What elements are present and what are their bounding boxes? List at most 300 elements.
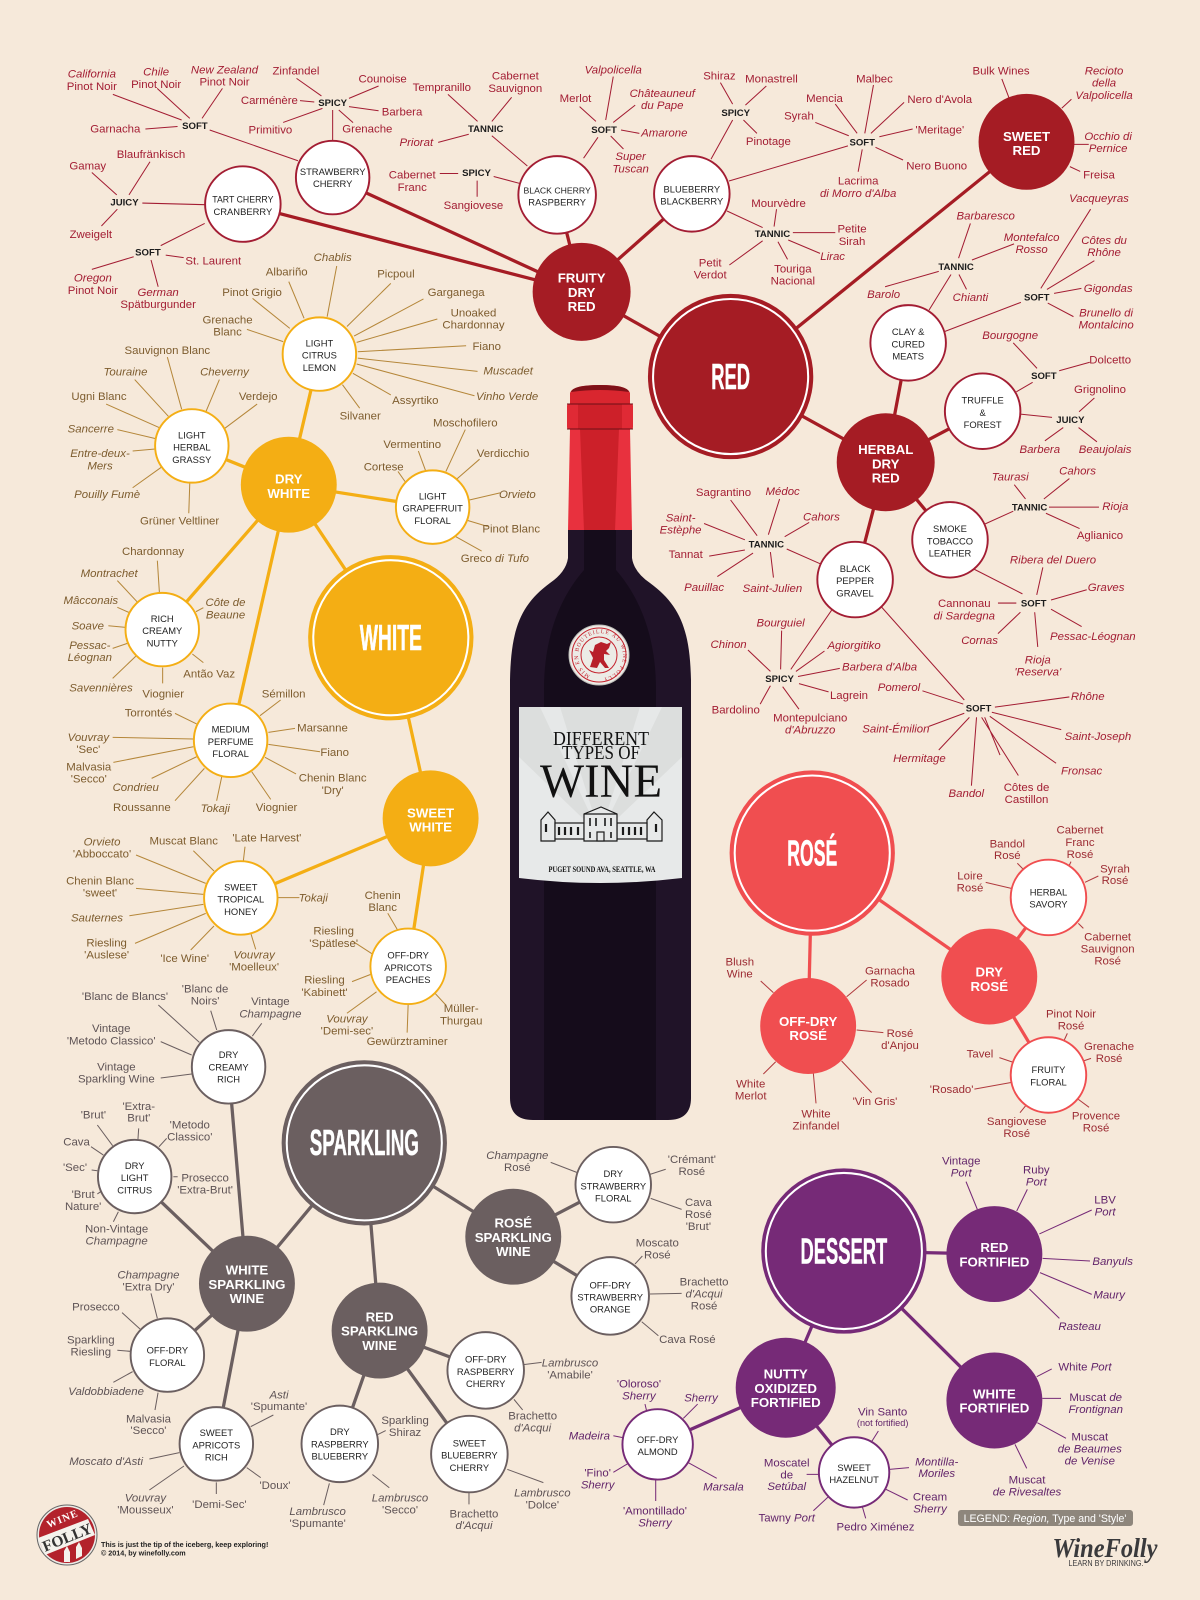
varietal labels: Gewürztraminer bbox=[367, 1036, 448, 1048]
varietal labels: Priorat bbox=[400, 137, 434, 149]
varietal labels: Vintage bbox=[251, 996, 290, 1008]
varietal labels: 'Vin Gris' bbox=[853, 1096, 897, 1108]
node: truffle and forest: & bbox=[980, 408, 987, 418]
connector lines bbox=[92, 162, 205, 287]
varietal labels: Montilla- bbox=[915, 1456, 958, 1468]
varietal labels: Pinot Grigio bbox=[222, 287, 282, 299]
varietal labels: di Morro d'Alba bbox=[820, 188, 896, 200]
varietal labels bbox=[63, 1101, 233, 1247]
group: dry creamy rich bbox=[67, 983, 301, 1104]
varietal labels: Roussanne bbox=[113, 802, 171, 814]
varietal labels: Brachetto bbox=[450, 1508, 498, 1520]
varietal labels: Grenache bbox=[1084, 1041, 1134, 1053]
node: smoke tobacco leather: LEATHER bbox=[929, 549, 971, 559]
varietal labels bbox=[66, 688, 367, 815]
varietal labels: Cabernet bbox=[492, 71, 539, 83]
varietal labels: Grenache bbox=[203, 314, 253, 326]
hub: sweet white bbox=[383, 770, 479, 866]
varietal labels: Brunello di bbox=[1079, 307, 1133, 319]
node: off-dry almond: ALMOND bbox=[638, 1447, 678, 1457]
node: dry creamy rich: RICH bbox=[217, 1075, 240, 1085]
varietal labels: de Beaumes bbox=[1058, 1443, 1122, 1455]
varietal labels: Rosé bbox=[957, 882, 983, 894]
varietal labels: Grignolino bbox=[1074, 384, 1126, 396]
varietal labels: Pouilly Fumè bbox=[74, 489, 140, 501]
varietal labels bbox=[569, 1378, 744, 1530]
varietal labels: Sauvignon Blanc bbox=[125, 345, 210, 357]
varietal labels: Orvieto bbox=[499, 489, 536, 501]
hub: fruity dry red: FRUITY bbox=[558, 271, 606, 286]
connector lines bbox=[149, 1415, 273, 1494]
varietal labels: Tuscan bbox=[612, 163, 649, 175]
hub: white fortified: WHITE bbox=[973, 1386, 1016, 1401]
varietal labels: Pinot Noir bbox=[67, 81, 117, 93]
hub: fruity dry red bbox=[533, 243, 631, 341]
varietal labels: 'Kabinett' bbox=[301, 987, 348, 999]
connector lines bbox=[1013, 343, 1097, 442]
group: off-dry floral bbox=[67, 1270, 204, 1437]
varietal labels: Rioja bbox=[1025, 654, 1051, 666]
varietal labels: Malvasia bbox=[126, 1413, 171, 1425]
node: light grapefruit floral bbox=[396, 470, 469, 544]
varietal labels: Ugni Blanc bbox=[71, 391, 127, 403]
node: off-dry raspberry cherry: OFF-DRY bbox=[465, 1355, 506, 1365]
hub: nutty oxidized fortified: OXIDIZED bbox=[754, 1381, 817, 1396]
varietal labels: della bbox=[1092, 78, 1116, 90]
varietal labels: Port bbox=[951, 1168, 973, 1180]
group: medium perfume floral bbox=[66, 688, 367, 815]
varietal labels: d'Acqui bbox=[455, 1520, 493, 1532]
varietal labels: Sherry bbox=[622, 1390, 657, 1402]
varietal labels: Pernice bbox=[1089, 143, 1127, 155]
thick connectors: dessert bbox=[658, 1251, 994, 1472]
connector lines bbox=[885, 209, 1094, 332]
varietal labels: Rosé bbox=[1083, 1122, 1109, 1134]
hub: red sparkling wine bbox=[332, 1283, 428, 1379]
varietal labels: Super bbox=[615, 151, 646, 163]
node: dry strawberry floral: FLORAL bbox=[595, 1194, 632, 1204]
varietal labels: SOFT bbox=[849, 137, 875, 148]
varietal labels: SOFT bbox=[966, 704, 991, 715]
legend bbox=[958, 1510, 1133, 1526]
logo: wine folly badge: WINE bbox=[45, 1508, 80, 1531]
node: sweet tropical honey: TROPICAL bbox=[217, 895, 264, 905]
node: off-dry floral bbox=[131, 1318, 204, 1392]
varietal labels: Valpolicella bbox=[585, 64, 642, 76]
connector lines bbox=[711, 83, 913, 265]
varietal labels: Franc bbox=[398, 182, 427, 194]
varietal labels: Vouvray bbox=[326, 1013, 369, 1025]
panel: rose wines bbox=[726, 770, 1135, 1140]
varietal labels: Nature' bbox=[65, 1201, 101, 1213]
varietal labels: Provence bbox=[1072, 1110, 1120, 1122]
varietal labels: Pessac- bbox=[69, 640, 110, 652]
varietal labels: Setúbal bbox=[767, 1481, 807, 1493]
connector lines bbox=[807, 1431, 909, 1518]
node: sweet red: RED bbox=[1013, 143, 1041, 158]
connector lines bbox=[113, 1293, 158, 1410]
varietal labels: Champagne bbox=[86, 1235, 148, 1247]
varietal labels: Riesling bbox=[313, 926, 354, 938]
varietal labels: White bbox=[736, 1078, 765, 1090]
varietal labels: 'Brut' bbox=[686, 1221, 711, 1233]
node: truffle and forest: TRUFFLE bbox=[962, 396, 1004, 406]
varietal labels: Garnacha bbox=[90, 124, 141, 136]
varietal labels: SOFT bbox=[1024, 293, 1050, 304]
varietal labels: Cabernet bbox=[389, 170, 436, 182]
node: clay and cured meats bbox=[870, 305, 946, 381]
node: clay and cured meats: MEATS bbox=[892, 352, 924, 362]
node: black cherry raspberry: RASPBERRY bbox=[528, 198, 587, 208]
panel: sparkling wines bbox=[63, 983, 728, 1532]
varietal labels: 'Spumante' bbox=[251, 1401, 307, 1413]
node: off-dry strawberry orange: STRAWBERRY bbox=[577, 1292, 644, 1302]
varietal labels: 'Ice Wine' bbox=[160, 953, 209, 965]
group: herbal savory bbox=[957, 824, 1135, 967]
connector lines bbox=[966, 1182, 1092, 1318]
varietal labels: Sherry bbox=[913, 1503, 948, 1515]
node: dry strawberry floral: DRY bbox=[603, 1169, 623, 1179]
varietal labels: Prosecco bbox=[181, 1172, 229, 1184]
varietal labels: 'Meritage' bbox=[915, 125, 964, 137]
varietal labels: Prosecco bbox=[72, 1302, 120, 1314]
node: herbal savory: HERBAL bbox=[1030, 887, 1067, 897]
connector lines bbox=[1002, 79, 1089, 171]
varietal labels: Freisa bbox=[1083, 170, 1115, 182]
varietal labels: Saint-Julien bbox=[743, 583, 802, 595]
varietal labels: Bandol bbox=[949, 788, 985, 800]
hub: off-dry rose: OFF-DRY bbox=[779, 1014, 837, 1029]
varietal labels: Cahors bbox=[803, 511, 840, 523]
hub: fruity dry red: RED bbox=[568, 299, 596, 314]
varietal labels: 'Secco' bbox=[130, 1425, 166, 1437]
varietal labels: Shiraz bbox=[389, 1427, 422, 1439]
varietal labels: Greco di Tufo bbox=[461, 553, 529, 565]
varietal labels: Viognier bbox=[142, 688, 184, 700]
node: blueberry blackberry: BLACKBERRY bbox=[660, 197, 724, 207]
varietal labels: Viognier bbox=[256, 802, 298, 814]
label location text: PUGET SOUND AVA, SEATTLE, WA bbox=[548, 864, 656, 874]
connector lines bbox=[158, 1005, 262, 1078]
varietal labels: 'Blanc de Blancs' bbox=[82, 991, 168, 1003]
varietal labels: Sparkling bbox=[381, 1415, 429, 1427]
varietal labels: Rosé bbox=[504, 1162, 531, 1174]
node: dry creamy rich: CREAMY bbox=[209, 1062, 249, 1072]
hub: fruity dry red: DRY bbox=[568, 285, 596, 300]
varietal labels: Rosé bbox=[994, 850, 1021, 862]
varietal labels: 'Mousseux' bbox=[117, 1504, 174, 1516]
connector lines bbox=[347, 913, 446, 1033]
varietal labels: Pomerol bbox=[878, 682, 921, 694]
varietal labels: 'Brut bbox=[72, 1189, 95, 1201]
node: sweet red bbox=[979, 94, 1074, 190]
varietal labels: Malvasia bbox=[66, 761, 111, 773]
node: sweet apricots rich bbox=[180, 1407, 253, 1481]
varietal labels: 'Spätlese' bbox=[309, 938, 358, 950]
node: rich creamy nutty: NUTTY bbox=[147, 638, 179, 648]
label title: TYPES OF bbox=[562, 742, 640, 764]
varietal labels: 'Extra-Brut' bbox=[177, 1185, 233, 1197]
varietal labels: 'Crémant' bbox=[668, 1154, 716, 1166]
varietal labels: Vouvray bbox=[233, 949, 276, 961]
varietal labels: 'Extra- bbox=[122, 1101, 155, 1113]
group: sweet apricots rich bbox=[69, 1389, 307, 1516]
varietal labels bbox=[389, 64, 697, 212]
hub: herbal dry red bbox=[837, 413, 935, 511]
varietal labels: 'Metodo bbox=[170, 1120, 210, 1132]
node: off-dry strawberry orange: OFF-DRY bbox=[589, 1280, 631, 1290]
varietal labels: Sauvignon bbox=[488, 83, 542, 95]
varietal labels: Moscatel bbox=[764, 1457, 810, 1469]
connector lines bbox=[398, 430, 500, 551]
thick connectors: white bbox=[162, 354, 433, 966]
varietal labels: Pinot Noir bbox=[1046, 1008, 1096, 1020]
node: light herbal grassy: LIGHT bbox=[178, 430, 206, 440]
node: fruity floral: FRUITY bbox=[1032, 1065, 1065, 1075]
label title: DIFFERENT bbox=[553, 728, 649, 750]
node: off-dry apricots peaches bbox=[370, 929, 446, 1004]
varietal labels: Verdot bbox=[694, 270, 728, 282]
varietal labels: Assyrtiko bbox=[392, 395, 438, 407]
varietal labels: LBV bbox=[1094, 1194, 1116, 1206]
varietal labels: Frontignan bbox=[1068, 1404, 1123, 1416]
varietal labels: Gigondas bbox=[1084, 283, 1133, 295]
varietal labels bbox=[67, 983, 301, 1086]
varietal labels: de Venise bbox=[1065, 1455, 1115, 1467]
varietal labels: Barbera bbox=[382, 106, 423, 118]
varietal labels: Cannonau bbox=[938, 598, 991, 610]
varietal labels: Moscato bbox=[636, 1237, 679, 1249]
varietal labels: Rosé bbox=[1102, 875, 1128, 887]
varietal labels: Estèphe bbox=[660, 525, 702, 537]
varietal labels: 'Dolce' bbox=[526, 1499, 559, 1511]
group: fruity floral bbox=[930, 1008, 1134, 1140]
varietal labels: SPICY bbox=[318, 98, 348, 109]
varietal labels: TANNIC bbox=[749, 539, 784, 550]
varietal labels: Fiano bbox=[320, 747, 349, 759]
node: light grapefruit floral: FLORAL bbox=[414, 516, 451, 526]
hub: dry rose: ROSÉ bbox=[970, 979, 1008, 994]
varietal labels: Sherry bbox=[684, 1392, 719, 1404]
group: red fortified bbox=[942, 1155, 1133, 1333]
varietal labels: Port bbox=[1095, 1206, 1116, 1218]
varietal labels: Cava Rosé bbox=[659, 1334, 716, 1346]
group: clay and cured meats bbox=[867, 193, 1134, 381]
node: sweet blueberry cherry: CHERRY bbox=[450, 1463, 490, 1473]
varietal labels: Bandol bbox=[990, 838, 1025, 850]
varietal labels: Touraine bbox=[104, 367, 148, 379]
group: light citrus lemon bbox=[203, 252, 538, 422]
varietal labels: SPICY bbox=[462, 168, 492, 179]
connector lines bbox=[974, 1033, 1091, 1113]
node: dry creamy rich bbox=[192, 1030, 265, 1104]
varietal labels: 'Rosado' bbox=[930, 1084, 973, 1096]
logo: wine folly badge bbox=[37, 1505, 97, 1565]
varietal labels: 'Auslese' bbox=[84, 950, 129, 962]
connector lines bbox=[761, 980, 883, 1103]
node: rich creamy nutty: RICH bbox=[151, 614, 174, 624]
varietal labels: Sangiovese bbox=[444, 200, 503, 212]
varietal labels: Côtes du bbox=[1081, 235, 1127, 247]
varietal labels: Nero d'Avola bbox=[907, 94, 973, 106]
connector lines bbox=[974, 479, 1099, 647]
varietal labels: Muscat Blanc bbox=[149, 835, 218, 847]
node: light herbal grassy bbox=[155, 409, 229, 483]
varietal labels: Brut' bbox=[127, 1113, 150, 1125]
varietal labels: Non-Vintage bbox=[85, 1223, 148, 1235]
varietal labels: Malbec bbox=[856, 74, 893, 86]
varietal labels: 'Abboccato' bbox=[73, 849, 131, 861]
varietal labels: Chenin Blanc bbox=[66, 875, 134, 887]
node: light citrus lemon: LEMON bbox=[303, 363, 336, 373]
varietal labels: Merlot bbox=[560, 93, 592, 105]
varietal labels: Rosado bbox=[870, 977, 910, 989]
varietal labels: Léognan bbox=[68, 652, 112, 664]
varietal labels: Taurasi bbox=[992, 472, 1029, 484]
varietal labels: Cava bbox=[63, 1136, 90, 1148]
varietal labels: Zinfandel bbox=[793, 1120, 839, 1132]
varietal labels bbox=[301, 890, 482, 1048]
varietal labels: Müller- bbox=[444, 1003, 479, 1015]
varietal labels: Counoise bbox=[359, 74, 407, 86]
varietal labels: Moriles bbox=[918, 1468, 955, 1480]
group: sweet hazelnut bbox=[759, 1406, 958, 1534]
varietal labels: Lirac bbox=[820, 251, 845, 263]
varietal labels: Pinot Noir bbox=[68, 285, 118, 297]
hub: rose bbox=[730, 770, 895, 936]
connector lines bbox=[704, 499, 1069, 786]
group: off-dry rose labels bbox=[726, 956, 919, 1132]
varietal labels: Sancerre bbox=[68, 424, 114, 436]
varietal labels: Unoaked bbox=[451, 307, 496, 319]
node: strawberry cherry: CHERRY bbox=[313, 179, 353, 189]
hub: dessert bbox=[761, 1168, 927, 1334]
hub: red: RED bbox=[711, 357, 750, 397]
group: truffle and forest bbox=[945, 330, 1132, 456]
wine bottle bbox=[510, 385, 691, 1120]
varietal labels: Gamay bbox=[69, 160, 106, 172]
varietal labels: Médoc bbox=[766, 486, 800, 498]
node: off-dry raspberry cherry bbox=[447, 1332, 524, 1409]
varietal labels: California bbox=[68, 69, 116, 81]
hub: red sparkling wine: SPARKLING bbox=[341, 1324, 418, 1339]
hub: rose sparkling wine: SPARKLING bbox=[475, 1230, 552, 1245]
varietal labels: 'Spumante' bbox=[289, 1518, 346, 1530]
varietal labels: Spätburgunder bbox=[120, 299, 196, 311]
hub: sweet white: SWEET bbox=[407, 805, 454, 820]
varietal labels: Thurgau bbox=[440, 1015, 482, 1027]
node: light citrus lemon: LIGHT bbox=[306, 338, 333, 348]
varietal labels: Vin Santo bbox=[858, 1406, 907, 1418]
node: off-dry almond bbox=[622, 1409, 693, 1480]
varietal labels: 'Doux' bbox=[260, 1480, 290, 1492]
varietal labels: Muscat bbox=[1071, 1431, 1108, 1443]
varietal labels: Nero Buono bbox=[906, 160, 967, 172]
node: medium perfume floral: MEDIUM bbox=[212, 725, 250, 735]
varietal labels: Mers bbox=[87, 460, 113, 472]
varietal labels: Barbaresco bbox=[957, 210, 1015, 222]
node: off-dry strawberry orange: ORANGE bbox=[590, 1305, 631, 1315]
logo: winefolly wordmark: WineFolly bbox=[1052, 1533, 1158, 1563]
varietal labels: Dolcetto bbox=[1089, 354, 1131, 366]
varietal labels: Valpolicella bbox=[1075, 90, 1133, 102]
hub: rose: ROSÉ bbox=[787, 833, 837, 873]
varietal labels: Montepulciano bbox=[773, 712, 847, 724]
varietal labels: Verdejo bbox=[239, 391, 278, 403]
varietal labels: Muscadet bbox=[483, 365, 534, 377]
varietal labels: Vouvray bbox=[68, 732, 110, 744]
node: strawberry cherry bbox=[296, 141, 369, 214]
connector lines bbox=[324, 1362, 543, 1505]
varietal labels: Oregon bbox=[74, 273, 112, 285]
node: truffle and forest: FOREST bbox=[964, 420, 1002, 430]
varietal labels: Soave bbox=[72, 621, 104, 633]
node: black pepper gravel: PEPPER bbox=[836, 576, 874, 586]
hub: red sparkling wine: RED bbox=[366, 1309, 394, 1324]
varietal labels bbox=[69, 1389, 307, 1516]
varietal labels bbox=[66, 832, 328, 974]
hub: herbal dry red: DRY bbox=[872, 456, 900, 471]
node: smoke tobacco leather bbox=[912, 502, 988, 578]
node: dry light citrus: LIGHT bbox=[121, 1173, 149, 1183]
varietal labels: Lambrusco bbox=[372, 1492, 428, 1504]
node: sweet tropical honey: HONEY bbox=[224, 907, 258, 917]
varietal labels: Rosé bbox=[1094, 955, 1121, 967]
hub: dry rose: DRY bbox=[976, 965, 1003, 980]
varietal labels: Savennières bbox=[69, 682, 133, 694]
varietal labels: 'Brut' bbox=[81, 1109, 106, 1121]
varietal labels: Cheverny bbox=[200, 367, 250, 379]
varietal labels: Barbera d'Alba bbox=[842, 661, 917, 673]
varietal labels: Blanc bbox=[213, 327, 242, 339]
varietal labels: Bulk Wines bbox=[972, 65, 1030, 77]
varietal labels: Moscato d'Asti bbox=[69, 1456, 143, 1468]
hub: herbal dry red: HERBAL bbox=[858, 442, 913, 457]
hub: white: WHITE bbox=[360, 618, 422, 658]
varietal labels: Sauvignon bbox=[1081, 943, 1135, 955]
hub: rose sparkling wine bbox=[465, 1189, 561, 1285]
connector lines bbox=[106, 357, 257, 513]
node: sweet apricots rich: SWEET bbox=[200, 1428, 233, 1438]
node: off-dry apricots peaches: PEACHES bbox=[386, 975, 431, 985]
hub: white sparkling wine: SPARKLING bbox=[208, 1277, 285, 1292]
connector lines bbox=[113, 700, 320, 801]
varietal labels: Rosé bbox=[1003, 1128, 1030, 1140]
bottle foil capsule bbox=[567, 385, 633, 531]
hub: white fortified: FORTIFIED bbox=[959, 1401, 1030, 1416]
node: rich creamy nutty bbox=[126, 593, 199, 666]
varietal labels: Syrah bbox=[784, 110, 814, 122]
node: off-dry raspberry cherry: RASPBERRY bbox=[457, 1367, 515, 1377]
node: dry raspberry blueberry: DRY bbox=[330, 1427, 350, 1437]
varietal labels: TANNIC bbox=[755, 229, 790, 240]
varietal labels: Maury bbox=[1093, 1289, 1126, 1301]
varietal labels: 'Demi-Sec' bbox=[192, 1499, 247, 1511]
varietal labels: Tannat bbox=[669, 549, 704, 561]
group: sweet tropical honey bbox=[66, 832, 328, 974]
varietal labels bbox=[486, 1150, 728, 1346]
varietal labels: d'Abruzzo bbox=[785, 725, 835, 737]
varietal labels: St. Laurent bbox=[185, 255, 242, 267]
varietal labels: Valdobbiadene bbox=[68, 1386, 144, 1398]
varietal labels: Bourgogne bbox=[982, 330, 1038, 342]
varietal labels: Tawny Port bbox=[759, 1512, 816, 1524]
seal lion bbox=[589, 642, 611, 668]
varietal labels bbox=[867, 193, 1134, 332]
hub: dry rose bbox=[941, 929, 1037, 1024]
varietal labels: Riesling bbox=[86, 937, 127, 949]
varietal labels: (not fortified) bbox=[857, 1418, 908, 1428]
